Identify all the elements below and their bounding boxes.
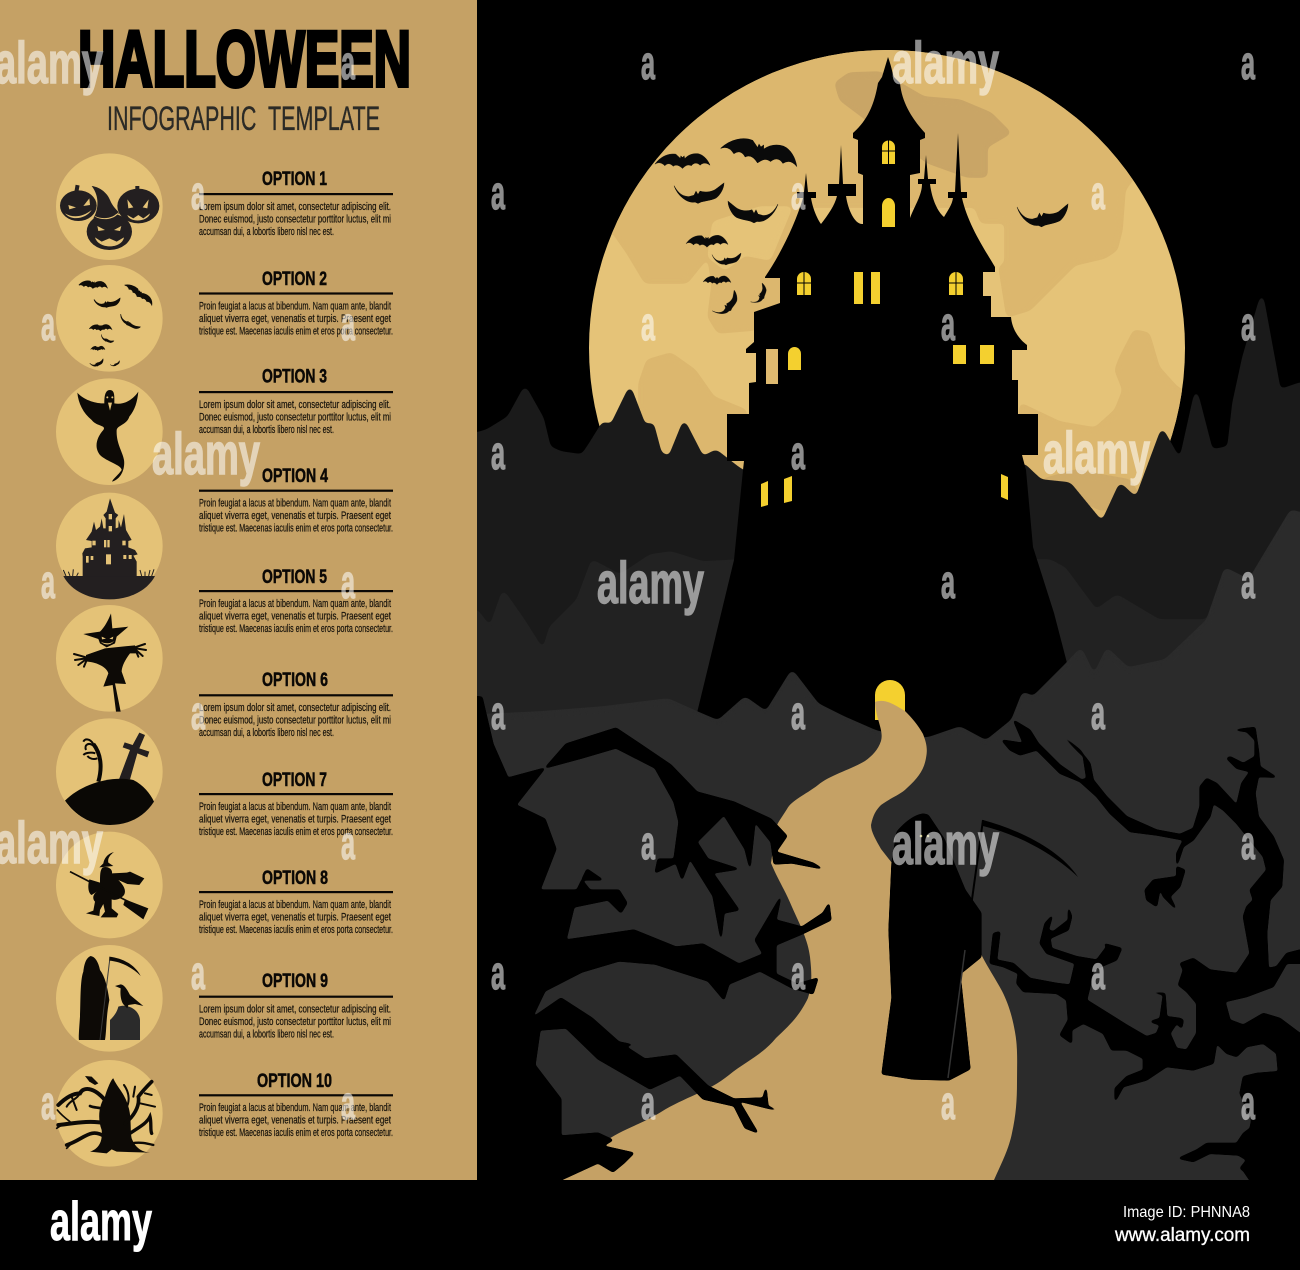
watermarks: small a: a — [41, 297, 55, 350]
option 4 — [199, 466, 393, 535]
option 3: Lorem ipsum dolor sit amet, consectetur adipiscing elit. — [199, 399, 391, 411]
option 7: tristique est. Maecenas iaculis enim et eros porta consectetur. — [199, 826, 393, 838]
watermarks: alamy: alamy — [892, 812, 999, 877]
option 9: Donec euismod, justo consectetur porttitor luctus, elit mi — [199, 1016, 391, 1028]
watermarks: small a: a — [191, 686, 205, 739]
watermarks: small a: a — [941, 1076, 955, 1129]
icon: spooky tree — [56, 1060, 163, 1167]
option 7: aliquet viverra eget, venenatis et turpis. Praesent eget — [199, 814, 391, 826]
watermarks: alamy — [0, 31, 1150, 877]
watermarks: small a: a — [341, 555, 355, 608]
gap showing the moon — [766, 349, 778, 384]
option 5 — [199, 567, 393, 635]
watermarks: alamy: alamy — [1043, 421, 1150, 486]
icon: haunted house — [56, 493, 163, 599]
option 5: OPTION 5 — [262, 567, 327, 588]
option 4: tristique est. Maecenas iaculis enim et eros porta consectetur. — [199, 523, 393, 535]
watermarks: small a: a — [341, 1076, 355, 1129]
watermarks: alamy: alamy — [152, 422, 260, 487]
watermarks: small a: a — [641, 1076, 655, 1129]
option 7: Proin feugiat a lacus at bibendum. Nam quam ante, blandit — [199, 801, 391, 813]
watermarks: small a: a — [941, 297, 955, 350]
option 6: OPTION 6 — [262, 670, 328, 691]
option 10: aliquet viverra eget, venenatis et turpis. Praesent eget — [199, 1114, 391, 1126]
option 7 — [199, 770, 393, 838]
foreground hill — [450, 510, 1300, 1210]
watermarks: small a: a — [791, 426, 805, 479]
option 8 — [199, 868, 393, 936]
grim reaper — [882, 814, 1078, 1080]
icon: witch on broom — [56, 832, 163, 938]
option 6: Lorem ipsum dolor sit amet, consectetur adipiscing elit. — [199, 702, 391, 714]
option 2: OPTION 2 — [262, 269, 327, 290]
watermarks: small a: a — [491, 686, 505, 739]
watermarks: small a: a — [1241, 555, 1255, 608]
icon: grave and hand — [56, 718, 163, 825]
scythe — [983, 820, 1078, 877]
watermarks: small a: a — [1091, 166, 1105, 219]
option 8: tristique est. Maecenas iaculis enim et eros porta consectetur. — [199, 924, 393, 936]
option 5: Proin feugiat a lacus at bibendum. Nam quam ante, blandit — [199, 598, 391, 610]
full moon — [589, 50, 1185, 518]
option 9: accumsan dui, a lobortis libero nisl nec est. — [199, 1029, 334, 1041]
watermarks: small a: a — [791, 166, 805, 219]
watermarks: small a: a — [191, 946, 205, 999]
watermarks: small a: a — [341, 36, 355, 89]
watermarks: small a: a — [791, 686, 805, 739]
watermarks: alamy: alamy — [892, 31, 999, 96]
option 10 — [199, 1071, 393, 1139]
watermarks: small a: a — [1091, 686, 1105, 739]
footer: website: www.alamy.com — [1114, 1225, 1250, 1246]
option 10: tristique est. Maecenas iaculis enim et eros porta consectetur. — [199, 1127, 393, 1139]
option 10: Proin feugiat a lacus at bibendum. Nam quam ante, blandit — [199, 1102, 391, 1114]
watermarks: small a: a — [641, 816, 655, 869]
watermarks: small a: a — [341, 816, 355, 869]
watermarks: small a: a — [791, 946, 805, 999]
footer: logo: alamy — [50, 1190, 152, 1252]
option 8: OPTION 8 — [262, 868, 328, 889]
option 5: aliquet viverra eget, venenatis et turpis. Praesent eget — [199, 610, 391, 622]
option 10: OPTION 10 — [257, 1071, 332, 1092]
watermarks: small a: a — [341, 297, 355, 350]
option 3: OPTION 3 — [262, 366, 327, 388]
castle windows — [761, 140, 1008, 507]
watermarks: small a: a — [491, 166, 505, 219]
option 9 — [199, 971, 393, 1041]
option 6: accumsan dui, a lobortis libero nisl nec est. — [199, 727, 334, 739]
option 2 — [199, 269, 393, 338]
icon: grim reaper with crow — [56, 945, 163, 1052]
option 8: Proin feugiat a lacus at bibendum. Nam quam ante, blandit — [199, 899, 391, 911]
option 4: OPTION 4 — [262, 466, 328, 487]
watermarks: small a: a — [1241, 816, 1255, 869]
option 2: aliquet viverra eget, venenatis et turpis. Praesent eget — [199, 313, 391, 325]
option 1: OPTION 1 — [262, 169, 327, 190]
option 5: tristique est. Maecenas iaculis enim et eros porta consectetur. — [199, 623, 393, 635]
icon: pumpkins — [56, 153, 163, 260]
option 3: accumsan dui, a lobortis libero nisl nec est. — [199, 424, 334, 436]
footer band — [0, 1180, 1300, 1270]
far mountains — [450, 292, 1300, 1210]
mid mountains — [450, 510, 1300, 1210]
panel: left sidebar — [0, 0, 477, 1180]
option 1: Lorem ipsum dolor sit amet, consectetur adipiscing elit. — [199, 201, 391, 213]
castle — [697, 57, 1067, 760]
option 4: Proin feugiat a lacus at bibendum. Nam quam ante, blandit — [199, 498, 391, 510]
option 4: aliquet viverra eget, venenatis et turpis. Praesent eget — [199, 510, 391, 522]
option 6 — [199, 670, 393, 739]
watermarks: small a: a — [191, 166, 205, 219]
watermarks: alamy: alamy — [597, 551, 704, 616]
watermarks: small a: a — [1091, 946, 1105, 999]
watermarks: small a: a — [1241, 297, 1255, 350]
watermarks: small a: a — [641, 297, 655, 350]
option 2: tristique est. Maecenas iaculis enim et eros porta consectetur. — [199, 326, 393, 338]
left tree — [450, 695, 831, 1210]
title: HALLOWEEN — [78, 14, 411, 103]
castle door — [875, 680, 905, 720]
option 1: accumsan dui, a lobortis libero nisl nec est. — [199, 226, 334, 238]
option 1: Donec euismod, justo consectetur porttitor luctus, elit mi — [199, 214, 391, 226]
icon: scarecrow — [56, 605, 163, 712]
watermarks: small a: a — [941, 555, 955, 608]
option 9: OPTION 9 — [262, 971, 328, 992]
option 1 — [199, 169, 393, 238]
watermarks: small a: a — [491, 426, 505, 479]
icon: bats — [56, 265, 163, 372]
watermarks: small a: a — [41, 555, 55, 608]
watermarks: small a: a — [1241, 1076, 1255, 1129]
option 7: OPTION 7 — [262, 770, 327, 791]
right tree — [990, 720, 1300, 1200]
option 2: Proin feugiat a lacus at bibendum. Nam quam ante, blandit — [199, 300, 391, 312]
watermarks: small a: a — [1241, 36, 1255, 89]
option 8: aliquet viverra eget, venenatis et turpis. Praesent eget — [199, 912, 391, 924]
footer: image id: Image ID: PHNNA8 — [1123, 1204, 1250, 1221]
option 3 — [199, 366, 393, 436]
option 3: Donec euismod, justo consectetur porttitor luctus, elit mi — [199, 412, 391, 424]
watermarks: small a: a — [641, 36, 655, 89]
subtitle: INFOGRAPHIC TEMPLATE — [107, 100, 380, 138]
watermarks: small a: a — [41, 1076, 55, 1129]
reaper eyes — [920, 835, 929, 837]
bats over moon — [655, 133, 1068, 320]
icon: ghost — [56, 378, 163, 485]
winding path — [550, 701, 1017, 1200]
watermarks: small a: a — [491, 946, 505, 999]
option 9: Lorem ipsum dolor sit amet, consectetur adipiscing elit. — [199, 1004, 391, 1016]
option 6: Donec euismod, justo consectetur porttitor luctus, elit mi — [199, 714, 391, 726]
